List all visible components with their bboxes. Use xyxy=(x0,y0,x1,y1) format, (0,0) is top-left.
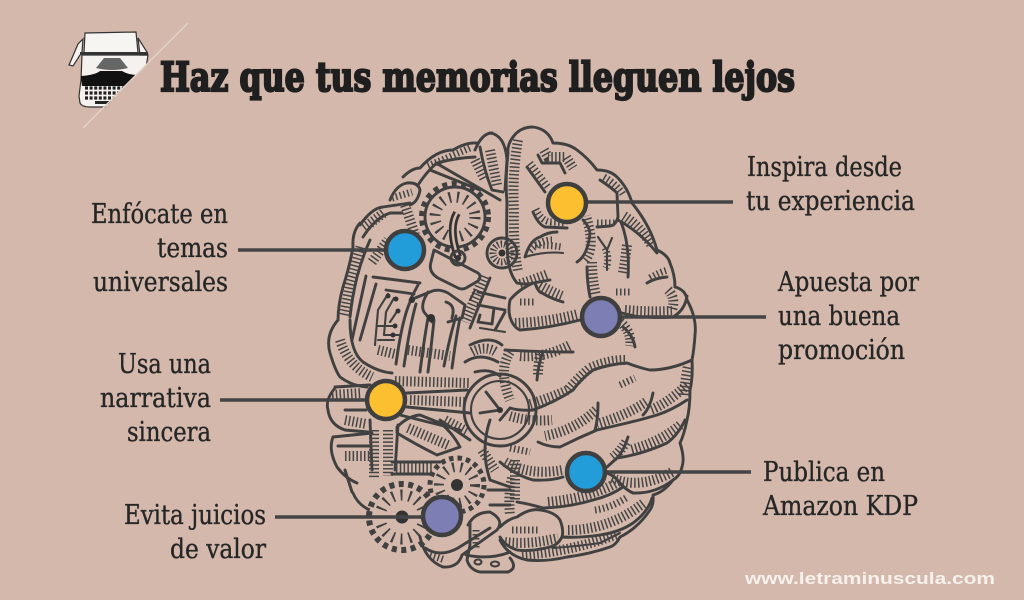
label: Usa una narrativa sincera xyxy=(100,349,211,448)
leader line: Apuesta por una buena promoción xyxy=(622,315,766,319)
label: Usa una narrativa sincera: Usa una xyxy=(118,349,211,380)
gauge xyxy=(464,374,536,446)
label: Inspira desde tu experiencia: Inspira desde xyxy=(747,152,902,183)
marker: yellow, top right xyxy=(548,184,586,222)
circuit board xyxy=(352,276,505,372)
leader line: Usa una narrativa sincera xyxy=(220,398,366,402)
lower gears xyxy=(369,458,484,550)
label: Enfócate en temas universales: Enfócate en xyxy=(91,199,228,230)
label: Usa una narrativa sincera: narrativa xyxy=(100,383,211,414)
label: Evita juicios de valor: de valor xyxy=(170,534,266,565)
marker: yellow, middle left xyxy=(367,381,405,419)
right hemisphere: organic lobes xyxy=(500,127,695,561)
label: Apuesta por una buena promoción: Apuesta por xyxy=(777,267,919,298)
label: Enfócate en temas universales: temas xyxy=(157,233,228,264)
icon: typewriter xyxy=(69,23,188,128)
label: Inspira desde tu experiencia: tu experiencia xyxy=(746,186,915,217)
label: Apuesta por una buena promoción: una buena xyxy=(778,301,900,332)
label: Publica en Amazon KDP: Amazon KDP xyxy=(762,491,918,522)
website url: www.letraminuscula.com xyxy=(744,569,995,588)
label: Usa una narrativa sincera: sincera xyxy=(127,417,211,448)
small dial xyxy=(487,238,517,268)
ribbed tubes xyxy=(327,320,502,510)
marker: blue, bottom right xyxy=(567,453,605,491)
label: Inspira desde tu experiencia xyxy=(746,152,915,217)
title: Haz que tus memorias lleguen lejos xyxy=(160,54,795,101)
label: Evita juicios de valor: Evita juicios xyxy=(124,500,266,531)
tubes along the top edge xyxy=(338,133,507,320)
leader line: Publica en Amazon KDP xyxy=(607,470,751,474)
brain illustration xyxy=(327,127,695,572)
label: Enfócate en temas universales xyxy=(91,199,228,298)
label: Publica en Amazon KDP xyxy=(762,457,918,522)
connector chip xyxy=(430,250,490,328)
label: Evita juicios de valor xyxy=(124,500,266,565)
marker: purple, middle right xyxy=(582,298,620,336)
marker: blue, top left xyxy=(386,231,424,269)
hatching xyxy=(514,140,518,272)
label: Apuesta por una buena promoción xyxy=(777,267,919,366)
left hemisphere: machinery xyxy=(327,133,536,572)
label: Enfócate en temas universales: universales xyxy=(93,267,228,298)
leader line: Evita juicios de valor xyxy=(275,515,422,519)
leader line: Inspira desde tu experiencia xyxy=(587,200,733,204)
top gear xyxy=(422,184,488,257)
leader line: Enfócate en temas universales xyxy=(238,248,385,252)
clamp and hose xyxy=(420,420,515,572)
label: Apuesta por una buena promoción: promoción xyxy=(778,335,905,366)
label: Publica en Amazon KDP: Publica en xyxy=(763,457,885,488)
marker: purple, bottom left xyxy=(423,497,461,535)
